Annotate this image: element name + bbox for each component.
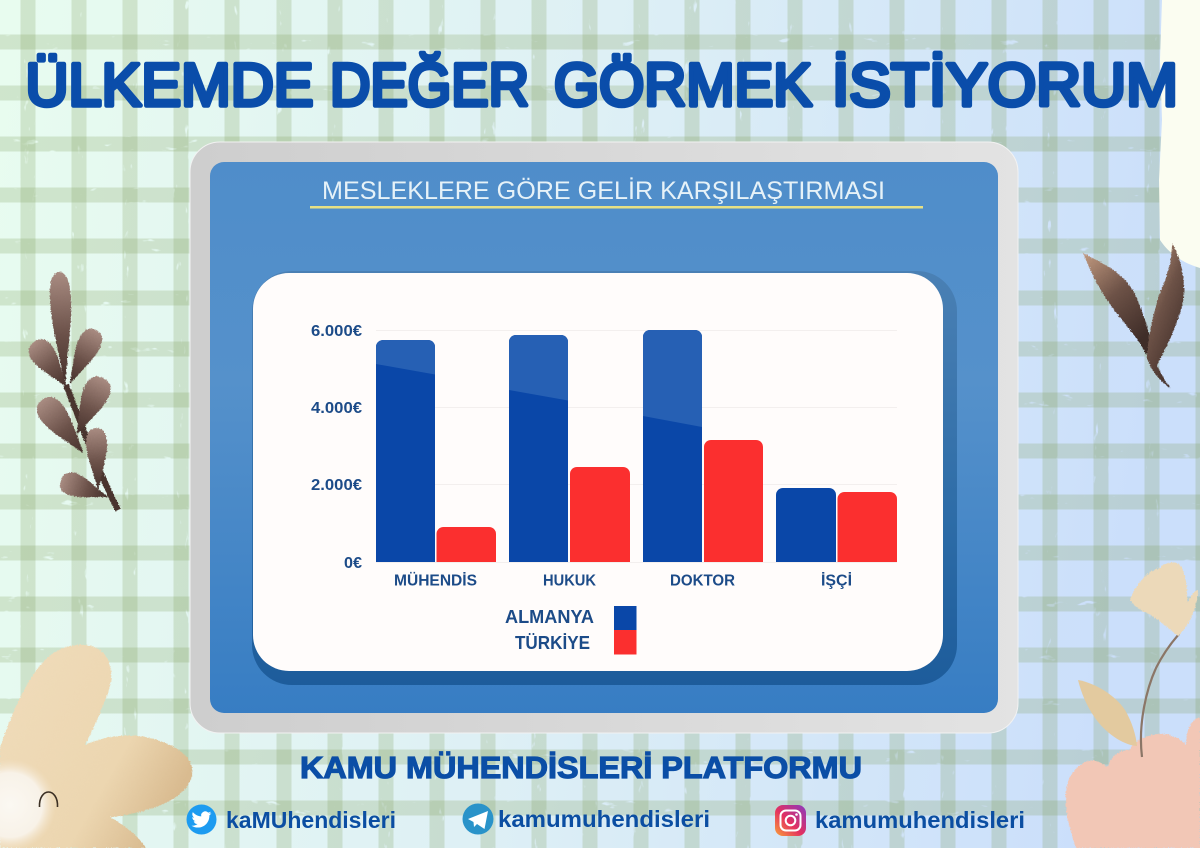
title: ÜLKEMDE	[26, 52, 314, 118]
bars: HUKUK	[509, 335, 630, 562]
category labels	[394, 570, 852, 590]
pink blob	[1066, 717, 1200, 848]
social: telegram	[462, 804, 710, 834]
bars: İŞÇİ	[776, 488, 897, 562]
mouth	[39, 792, 58, 807]
legend: TÜRKİYE	[515, 633, 590, 653]
illustration: right leaves	[1083, 243, 1184, 389]
category labels: HUKUK	[543, 572, 596, 590]
social: instagram	[775, 805, 1025, 836]
torn paper corner	[1159, 0, 1200, 268]
heading underline	[310, 206, 923, 208]
category labels: İŞÇİ	[821, 572, 852, 590]
stem	[1141, 634, 1179, 757]
title: GÖRMEK	[554, 52, 812, 118]
bars: MÜHENDİS	[376, 340, 496, 562]
icon: twitter	[186, 804, 216, 834]
handle: twitter: kaMUhendisleri	[226, 807, 396, 833]
legend	[505, 606, 636, 654]
title: İSTİYORUM	[832, 52, 1178, 118]
icon: telegram	[462, 804, 494, 834]
chart heading: MESLEKLERE GÖRE GELİR KARŞILAŞTIRMASI	[322, 176, 885, 205]
blossom	[1130, 562, 1198, 636]
illustration: bottom-left bunny	[0, 645, 192, 848]
legend: ALMANYA	[505, 607, 594, 627]
y axis labels: 6.000€	[311, 323, 362, 340]
y axis labels: 2.000€	[311, 477, 362, 494]
panel: blue screen	[210, 162, 998, 713]
illustration: bottom-right flower	[1066, 562, 1200, 848]
y axis labels: 0€	[344, 555, 362, 572]
category labels: MÜHENDİS	[394, 570, 477, 590]
social: twitter	[186, 804, 396, 834]
title	[26, 52, 1178, 118]
illustration: left leaf sprig	[24, 271, 118, 510]
handle: telegram: kamumuhendisleri	[498, 806, 710, 832]
bar chart	[311, 323, 897, 654]
white patch	[0, 759, 56, 848]
bars: DOKTOR	[643, 330, 763, 562]
handle: instagram: kamumuhendisleri	[815, 807, 1025, 833]
platform name: KAMU MÜHENDİSLERİ PLATFORMU	[300, 750, 862, 785]
category labels: DOKTOR	[670, 572, 735, 590]
leaf	[1078, 680, 1137, 746]
y axis labels: 4.000€	[311, 400, 362, 417]
panel: tablet frame	[190, 142, 1018, 733]
panel: chart card	[253, 273, 943, 671]
icon: instagram	[775, 805, 806, 836]
title: DEĞER	[330, 52, 529, 118]
y axis labels	[311, 323, 362, 572]
card shadow	[252, 271, 957, 685]
